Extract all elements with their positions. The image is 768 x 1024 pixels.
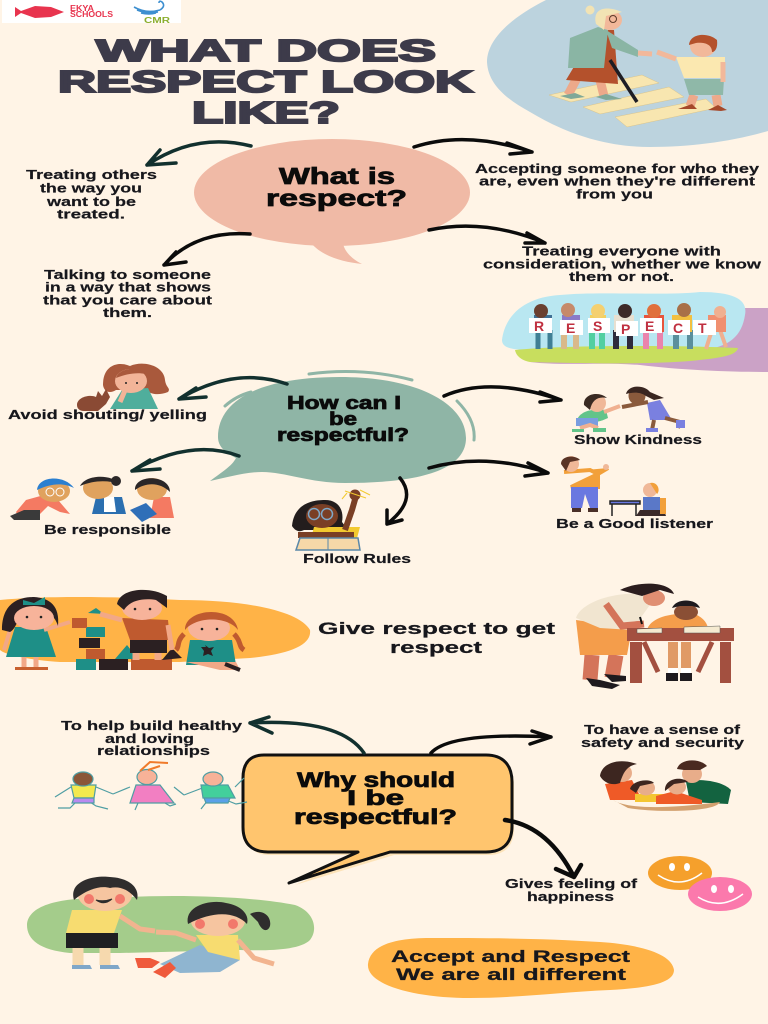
arrow: to accepting someone [414, 140, 532, 154]
arrow: to happiness [505, 820, 581, 877]
logos [2, 0, 181, 25]
text: treating everyone: them or not. [569, 270, 674, 284]
illustration: group holding RESPECT letters: E [645, 318, 654, 334]
arrow: to safety [431, 731, 551, 753]
text: give respect to get respect: Give respect to get [318, 620, 556, 638]
illustration: group holding RESPECT letters: T [698, 320, 707, 336]
text: accepting someone: are, even when they're different [479, 174, 756, 188]
illustration: group holding RESPECT letters: P [621, 321, 630, 337]
illustration: girl with bunny [77, 364, 169, 411]
illustration: children holding hands on green blob [27, 877, 314, 978]
arrow: to be responsible [132, 450, 239, 471]
text: happiness: Gives feeling of [505, 877, 638, 891]
text: talking to someone [43, 268, 213, 320]
text: give respect to get respect [318, 620, 556, 657]
speech bubble: how can I be respectful: respectful? [277, 424, 409, 445]
text: treating everyone [483, 244, 761, 284]
text: healthy relationships: To help build healthy [61, 719, 242, 733]
speech bubble: what is respect: respect? [266, 185, 407, 211]
text: healthy relationships [61, 719, 242, 758]
text: healthy relationships: relationships [97, 744, 210, 758]
speech bubble: how can I be respectful [210, 372, 474, 483]
text: accepting someone [475, 162, 759, 202]
illustration: child listening to adult [561, 456, 666, 516]
arrow: to treating everyone [429, 226, 545, 243]
text: happiness: happiness [527, 890, 614, 904]
text: treating others [26, 168, 157, 222]
text: accepting someone: from you [576, 188, 653, 202]
text: be responsible: Be responsible [44, 523, 171, 537]
text: treating others: treated. [57, 208, 125, 222]
text: give respect to get respect: respect [390, 639, 483, 657]
text: treating others: Treating others [26, 168, 157, 182]
text: safety and security: safety and security [581, 736, 744, 750]
arrow: to avoid shouting [179, 378, 287, 399]
logos: SCHOOLS [70, 10, 114, 19]
text: show kindness: Show Kindness [574, 433, 702, 447]
title [58, 33, 474, 130]
text: treating others: want to be [46, 195, 136, 209]
speech bubble: why should I be respectful: I be [347, 786, 404, 810]
speech bubble: why should I be respectful [243, 755, 514, 885]
speech bubble: why should I be respectful: respectful? [294, 805, 457, 829]
icon: smiley faces [648, 856, 752, 911]
illustration: group holding RESPECT letters [502, 292, 768, 372]
text: avoid shouting: Avoid shouting/ yelling [8, 408, 207, 422]
illustration: girl raising hand with book [292, 490, 370, 550]
illustration: group holding RESPECT letters: S [593, 318, 602, 334]
arrow: to treating others [147, 142, 251, 165]
illustration: family hugging [600, 760, 731, 811]
title: LIKE? [192, 95, 340, 130]
text: safety and security: To have a sense of [584, 723, 741, 737]
arrow: to relationships [250, 717, 364, 753]
callout: accept and respect: We are all different [396, 966, 627, 984]
text: safety and security [581, 723, 744, 750]
title: WHAT DOES [96, 33, 436, 68]
illustration: children showing kindness [572, 387, 685, 432]
title: RESPECT LOOK [58, 64, 474, 99]
callout: accept and respect: Accept and Respect [391, 948, 631, 966]
text: healthy relationships: and loving [105, 732, 194, 746]
speech bubble: how can I be respectful: How can I [287, 392, 401, 413]
illustration: teacher helping student [576, 584, 734, 689]
logos: EKYA [70, 4, 94, 13]
logos: CMR [144, 16, 170, 25]
arrow: to follow rules [387, 478, 407, 524]
speech bubble: why should I be respectful: Why should [297, 768, 455, 792]
text: talking to someone: them. [103, 306, 152, 320]
text: talking to someone: in a way that shows [45, 280, 211, 294]
text: treating everyone: Treating everyone with [522, 244, 721, 258]
text: talking to someone: Talking to someone [44, 268, 211, 282]
text: happiness [505, 877, 638, 904]
text: treating others: the way you [40, 182, 142, 196]
illustration: children building blocks [0, 590, 310, 670]
text: follow rules: Follow Rules [303, 552, 411, 566]
illustration: children holding hands, crayon style [55, 762, 247, 810]
text: be a good listener: Be a Good listener [556, 517, 713, 531]
illustration: group holding RESPECT letters: R [534, 318, 544, 334]
illustration: grandmother helped across the road [487, 0, 768, 147]
arrow: to good listener [429, 461, 548, 476]
text: treating everyone: consideration, whether we know [483, 258, 761, 272]
speech bubble: how can I be respectful: be [329, 408, 357, 429]
arrow: to talking [164, 234, 250, 265]
text: accepting someone: Accepting someone for who they [475, 162, 759, 176]
illustration: group holding RESPECT letters: E [566, 320, 575, 336]
speech bubble: what is respect [194, 139, 470, 264]
illustration: three children reading [10, 476, 174, 522]
text: talking to someone: that you care about [43, 294, 213, 308]
speech bubble: what is respect: What is [279, 163, 395, 189]
arrow: to show kindness [444, 387, 561, 402]
callout: accept and respect [368, 938, 674, 998]
illustration: group holding RESPECT letters: C [673, 320, 683, 336]
